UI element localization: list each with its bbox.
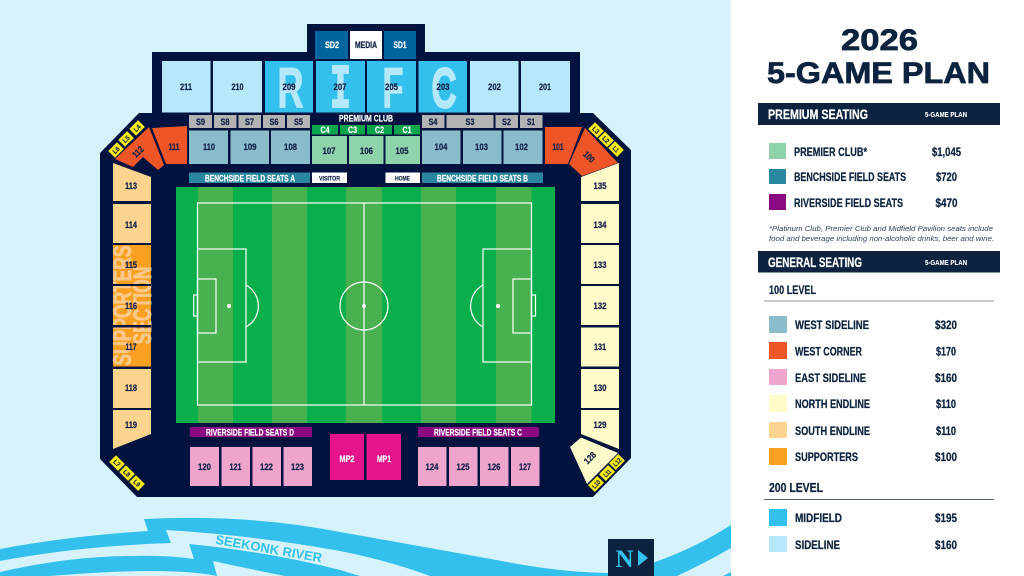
section 103: 103 (475, 142, 488, 152)
suite S7 (238, 115, 261, 128)
pitch (176, 187, 555, 423)
section 211 (162, 61, 210, 112)
suite S1 (520, 115, 542, 128)
suite S3 (446, 115, 494, 128)
suite S4: S4 (428, 117, 438, 127)
section 126 (480, 447, 508, 486)
legend: east sideline: $160 (935, 373, 957, 385)
legend: riverside field seats: RIVERSIDE FIELD SEATS (794, 196, 903, 210)
section 132: 132 (594, 301, 606, 311)
section 131: 131 (594, 342, 606, 352)
club box C1: C1 (402, 125, 412, 135)
title: 2026 (841, 24, 918, 57)
riverside field seats D: RIVERSIDE FIELD SEATS D (206, 428, 294, 438)
section 209: 209 (282, 82, 296, 92)
legend: east sideline (769, 369, 957, 385)
section 202 (470, 61, 518, 112)
footnote (769, 224, 994, 243)
section 134 (581, 204, 619, 243)
suite S2: S2 (502, 117, 511, 127)
section 207: I (330, 55, 351, 126)
title (767, 24, 990, 90)
section 113: 113 (125, 181, 137, 191)
visitor box: VISITOR (319, 176, 340, 182)
club box C2: C2 (375, 125, 384, 135)
section 120 (190, 447, 219, 486)
section 109: 109 (244, 142, 256, 152)
legend: west sideline (769, 316, 957, 333)
legend: west corner: WEST CORNER (795, 344, 862, 358)
supporters block with sections 115 to 117: 116 (125, 301, 137, 311)
legend: premier club: PREMIER CLUB* (794, 145, 867, 159)
legend: north endline (769, 395, 956, 412)
100 level heading: 100 LEVEL (769, 283, 816, 297)
section 104: 104 (434, 142, 448, 152)
section 133: 133 (594, 260, 606, 270)
suite S2 (496, 115, 518, 128)
stadium seating map (100, 24, 631, 497)
suite S1: S1 (527, 117, 535, 127)
section 100: 100 (581, 149, 597, 165)
legend: midfield (769, 509, 958, 526)
loge L7: L7 (111, 459, 121, 469)
section 121 (222, 447, 250, 486)
section 209: R (278, 56, 304, 120)
legend: midfield: $195 (935, 513, 958, 525)
benchside field seats A: BENCHSIDE FIELD SEATS A (205, 173, 295, 183)
section 107: 107 (322, 146, 336, 156)
section 100 (569, 128, 618, 176)
loge L8: L8 (121, 469, 131, 479)
section 127: 127 (519, 462, 531, 472)
section 201: 201 (539, 82, 551, 92)
legend: premier club: $1,045 (932, 147, 961, 159)
section 210: 210 (232, 82, 244, 92)
loge L1 (608, 141, 624, 157)
suite S5: S5 (294, 117, 303, 127)
legend: midfield: MIDFIELD (795, 511, 842, 525)
loge L11 (599, 465, 615, 481)
section 130 (581, 369, 619, 408)
club box C3 (340, 125, 365, 135)
home box: HOME (395, 176, 411, 182)
loge L10: L10 (591, 479, 603, 490)
loge L7 (109, 455, 125, 471)
club box C1 (394, 125, 420, 135)
section 110: 110 (203, 142, 215, 152)
suite S4 (422, 115, 444, 128)
midfield pavilion MP2 (330, 434, 364, 480)
loge L3: L3 (590, 126, 600, 136)
suite S6: S6 (270, 117, 278, 127)
section 108: 108 (284, 142, 297, 152)
suite S7: S7 (245, 117, 254, 127)
suite SD2 (315, 31, 348, 59)
loge L6 (108, 142, 124, 158)
section 123 (284, 447, 312, 486)
section 209 (265, 56, 313, 120)
loge L5 (118, 131, 134, 147)
section 105: 105 (396, 146, 408, 156)
section 105 (386, 136, 420, 164)
section 112 (115, 127, 164, 170)
premium seating header: 5-GAME PLAN (925, 112, 967, 119)
riverside field seats C: RIVERSIDE FIELD SEATS C (434, 428, 522, 438)
midfield pavilion MP1: MP1 (377, 454, 391, 464)
loge L2 (598, 132, 614, 147)
supporters block with sections 115 to 117 (109, 245, 157, 366)
section 131 (581, 328, 619, 366)
section 110 (189, 130, 228, 164)
section 111 (152, 126, 187, 164)
section 124 (418, 447, 446, 486)
loge L12: L12 (612, 457, 624, 468)
section 134: 134 (594, 220, 606, 230)
section 112: 112 (130, 144, 146, 160)
section 106 (349, 136, 384, 164)
suite SD1 (384, 31, 416, 59)
suite S8: S8 (220, 117, 230, 127)
section 101: 101 (552, 142, 564, 152)
general seating header: 5-GAME PLAN (925, 260, 967, 267)
section 114 (113, 204, 151, 243)
loge L2: L2 (600, 135, 610, 145)
legend: west corner (769, 342, 956, 359)
section 104 (422, 130, 460, 164)
section 118 (113, 369, 151, 408)
section 132 (581, 286, 619, 325)
suite SD2: SD2 (325, 40, 339, 50)
loge L6: L6 (112, 146, 122, 156)
section 207 (316, 55, 365, 126)
section 126: 126 (488, 462, 500, 472)
legend: riverside field seats: $470 (936, 198, 958, 210)
legend: benchside field seats: BENCHSIDE FIELD SEATS (794, 170, 906, 184)
supporters block with sections 115 to 117: 117 (126, 342, 136, 352)
section 135 (581, 163, 619, 201)
midfield pavilion MP1 (366, 434, 401, 480)
loge L9: L9 (131, 479, 141, 489)
media box (350, 31, 382, 59)
legend: west sideline: $320 (935, 320, 957, 332)
loge L3 (588, 122, 604, 138)
200 level heading: 200 LEVEL (769, 480, 823, 495)
benchside field seats B: BENCHSIDE FIELD SEATS B (437, 173, 528, 183)
club box C3: C3 (348, 125, 357, 135)
logo badge (608, 539, 654, 576)
legend: sideline: $160 (935, 540, 957, 552)
river label: SEEKONK RIVER (214, 532, 324, 565)
general seating header: GENERAL SEATING (768, 254, 862, 270)
section 211: 211 (180, 82, 192, 92)
suite S9: S9 (196, 117, 205, 127)
section 113 (113, 163, 151, 201)
section 205 (367, 56, 416, 120)
suite SD1: SD1 (394, 40, 406, 50)
section 109 (230, 130, 269, 164)
section 122: 122 (260, 462, 273, 472)
section 130: 130 (594, 383, 606, 393)
section 210 (213, 61, 262, 112)
section 128 (570, 438, 618, 484)
legend: south endline (769, 422, 956, 438)
footnote: *Platinum Club, Premier Club and Midfield Pavilion seats include (769, 224, 993, 233)
premium seating header (758, 103, 1000, 125)
section 119 (113, 410, 151, 449)
footnote: food and beverage including non-alcoholic drinks, beer and wine. (769, 234, 994, 243)
section 124: 124 (426, 462, 438, 472)
section 205: F (382, 56, 404, 120)
section 111: 111 (168, 142, 180, 152)
section 129 (581, 410, 619, 449)
section 203: C (432, 56, 456, 120)
section 205: 205 (385, 82, 398, 92)
legend: north endline: NORTH ENDLINE (795, 397, 870, 411)
section 114: 114 (125, 220, 137, 230)
premium seating header: PREMIUM SEATING (768, 106, 868, 122)
loge L9 (129, 475, 145, 491)
section 202: 202 (488, 82, 501, 92)
loge L4: L4 (133, 124, 143, 134)
section 135: 135 (594, 181, 606, 191)
loge L4 (129, 120, 145, 136)
section 203: 203 (436, 82, 450, 92)
section 101 (545, 127, 582, 164)
section 118: 118 (125, 383, 137, 393)
legend: south endline: SOUTH ENDLINE (795, 424, 870, 438)
loge L1: L1 (611, 145, 620, 155)
section 103 (463, 130, 502, 164)
section 127 (511, 447, 540, 486)
loge L5: L5 (122, 135, 132, 145)
home box (386, 172, 420, 183)
supporters watermark: SUPPORTERS (109, 246, 137, 366)
loge L11: L11 (602, 468, 613, 479)
section 128: 128 (582, 450, 598, 466)
legend: sideline: SIDELINE (795, 538, 840, 552)
section 107 (312, 136, 347, 164)
pricing panel (731, 0, 1024, 576)
loge L12 (609, 454, 625, 470)
legend: south endline: $110 (936, 426, 956, 438)
legend: east sideline: EAST SIDELINE (795, 371, 866, 385)
media box: MEDIA (355, 40, 377, 50)
legend: premier club (769, 143, 961, 159)
section 102 (504, 130, 542, 164)
section 108 (271, 130, 310, 164)
legend: supporters (769, 448, 957, 465)
suite S3: S3 (466, 117, 474, 127)
title: 5-GAME PLAN (767, 57, 990, 90)
general seating header (758, 251, 1000, 272)
section 121: 121 (230, 462, 242, 472)
legend: sideline (769, 536, 957, 552)
section 106: 106 (360, 146, 373, 156)
legend: west sideline: WEST SIDELINE (795, 318, 869, 332)
loge L10 (588, 476, 604, 492)
visitor box (312, 172, 347, 183)
suite S5 (287, 115, 310, 128)
section 102: 102 (515, 142, 528, 152)
section 129: 129 (594, 420, 606, 430)
section 133 (581, 245, 619, 284)
legend: riverside field seats (769, 194, 958, 210)
suite S8 (214, 115, 236, 128)
supporters block with sections 115 to 117: 115 (125, 260, 137, 270)
club box C4: C4 (320, 125, 330, 135)
section 123: 123 (291, 462, 304, 472)
premium club label: PREMIUM CLUB (339, 114, 393, 124)
section 122 (252, 447, 281, 486)
legend: supporters: SUPPORTERS (795, 450, 858, 464)
river illustration (0, 518, 731, 576)
legend: west corner: $170 (936, 346, 956, 358)
legend: supporters: $100 (935, 452, 957, 464)
legend: benchside field seats: $720 (936, 172, 957, 184)
club box C4 (312, 125, 338, 135)
stadium outline (100, 24, 631, 497)
section 120: 120 (198, 462, 211, 472)
legend: north endline: $110 (936, 399, 956, 411)
club box C2 (367, 125, 392, 135)
logo badge: N (615, 546, 634, 573)
midfield pavilion MP2: MP2 (340, 454, 354, 464)
section 203 (418, 56, 467, 120)
section 125: 125 (456, 462, 470, 472)
section 119: 119 (125, 420, 137, 430)
loge L8 (119, 465, 135, 481)
section 201 (521, 61, 570, 112)
section 125 (449, 447, 478, 486)
section 207: 207 (334, 82, 346, 92)
suite S6 (263, 115, 285, 128)
section watermark: SECTION (129, 266, 157, 344)
suite S9 (189, 115, 212, 128)
